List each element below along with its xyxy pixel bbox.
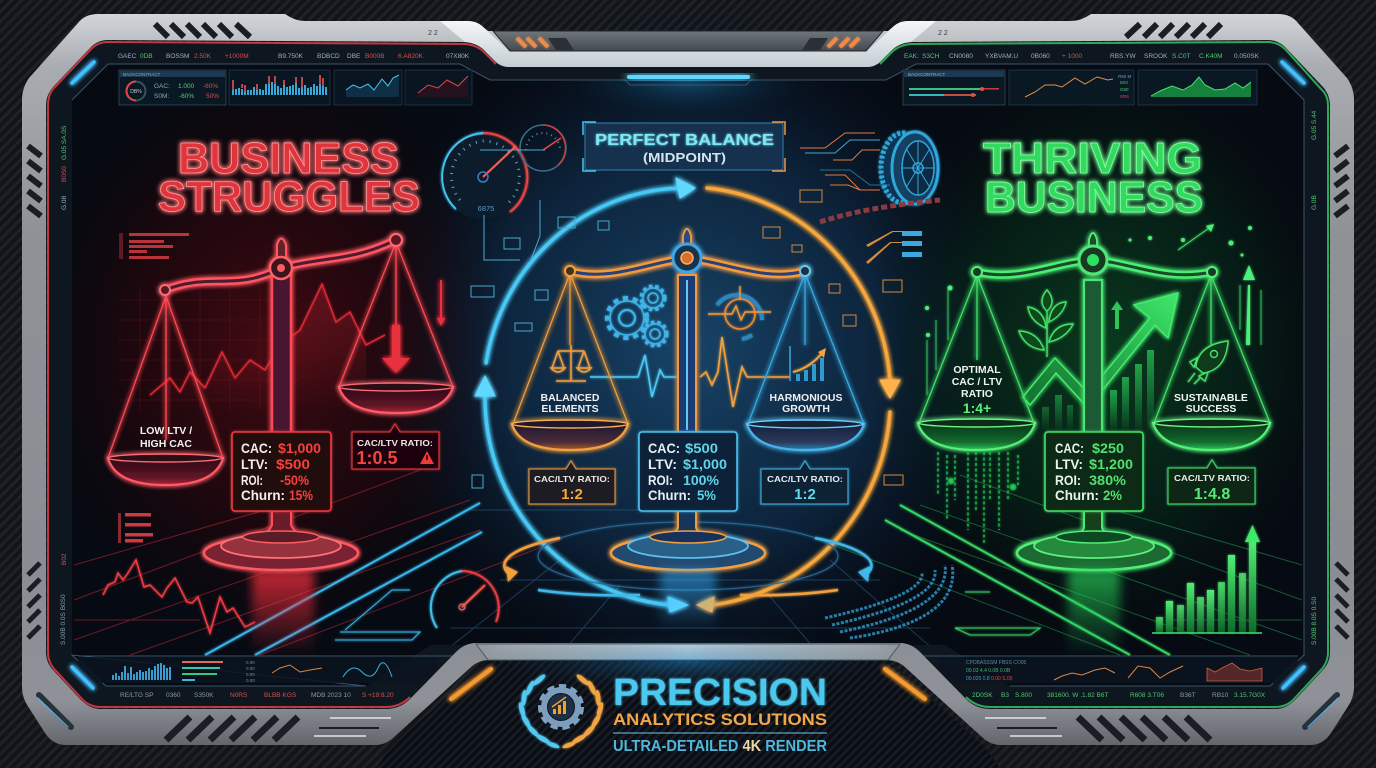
orange mini line bbox=[1054, 668, 1115, 680]
side rail text: right: G.05 S.44 bbox=[1311, 110, 1318, 140]
icon: growth mini chart bbox=[790, 346, 826, 381]
gauge: lower speedometer bbox=[431, 571, 499, 628]
top center white band bbox=[440, 21, 936, 67]
side rail text: left: G.05 SA.0S bbox=[61, 125, 68, 160]
metrics box: blue: 5% bbox=[697, 487, 717, 503]
side rail text: left: S.00B 0.0S B0S0 bbox=[60, 594, 67, 645]
label: optimal ratio: CAC / LTV bbox=[952, 376, 1002, 388]
tire tracks bbox=[825, 565, 953, 638]
metrics box: blue: ROI: bbox=[648, 472, 673, 488]
metrics box: red: CAC: bbox=[241, 440, 272, 456]
red chart behind left scale bbox=[118, 284, 385, 410]
ticker: bottom left: MDB 2023 10 bbox=[311, 692, 351, 699]
label: optimal ratio bbox=[952, 364, 1002, 416]
icon: laurel left bbox=[518, 673, 560, 749]
ticker: bottom right bbox=[972, 692, 1266, 699]
side rail text: right: G.0B bbox=[1311, 195, 1318, 210]
label: balanced elements bbox=[541, 392, 600, 415]
progress mini list: 0.00 bbox=[246, 660, 255, 665]
orange line mini panel: B50 bbox=[1120, 80, 1129, 85]
ticker: top left: BOSSM bbox=[166, 53, 189, 60]
blue slot on metal bbox=[38, 695, 1338, 727]
metrics mini panel bbox=[119, 70, 226, 105]
metrics box: red: LTV: bbox=[241, 456, 268, 472]
icon: gears bbox=[607, 286, 667, 346]
ticker: bottom left: RE/LTG SP bbox=[120, 692, 153, 699]
metrics box: blue: $1,000 bbox=[683, 456, 727, 472]
scale: green elevated bbox=[918, 233, 1270, 570]
icon: mini scale bbox=[551, 345, 591, 381]
scale: balanced center bbox=[512, 229, 864, 570]
dashboard strip: top right bbox=[903, 70, 1257, 105]
label: low ltv high cac: LOW LTV / bbox=[140, 425, 192, 437]
right green side light bbox=[1323, 115, 1325, 660]
metrics box: green bbox=[1045, 432, 1143, 511]
reflection under center scale bbox=[660, 570, 716, 630]
title: business struggles bbox=[158, 134, 420, 221]
metrics box: blue: Churn: bbox=[648, 487, 691, 503]
metrics mini panel: -60% bbox=[179, 93, 194, 100]
heading: perfect balance bbox=[583, 122, 785, 171]
green area mini panel bbox=[1138, 70, 1257, 105]
gauge: large speedometer: 6875 bbox=[478, 204, 494, 213]
bar chart background bbox=[1042, 350, 1154, 430]
curved striped track near tire bbox=[820, 200, 940, 222]
ticker: top right: RBS.YW bbox=[1110, 53, 1137, 60]
table mini block bbox=[966, 660, 1027, 682]
dashboard strip: bottom left bbox=[78, 657, 438, 683]
label: low ltv high cac: HIGH CAC bbox=[140, 438, 192, 450]
side rail text: left: B0S0 bbox=[61, 166, 68, 182]
metrics mini panel: GAC: bbox=[154, 83, 170, 90]
metrics box: green: $250 bbox=[1092, 440, 1124, 456]
heartbeat line bbox=[590, 337, 790, 407]
orange line mini panel: R60 M bbox=[1118, 74, 1132, 79]
progress mini list: 0.00 bbox=[246, 678, 255, 683]
ticker: top left: GAEC bbox=[118, 53, 137, 60]
dashboard strip: top left bbox=[119, 70, 472, 105]
ratio box: red: 1:0.5 bbox=[356, 448, 398, 468]
red line mini panel bbox=[405, 70, 472, 105]
title: thriving business: BUSINESS bbox=[985, 173, 1203, 222]
text: 2 2 bbox=[938, 30, 948, 37]
metrics mini panel: 50% bbox=[206, 93, 219, 100]
title: thriving business: THRIVING bbox=[983, 134, 1202, 183]
side rail text: left: B02 bbox=[61, 553, 68, 565]
table mini block: CPDBASSSM FBSS CO05 bbox=[966, 660, 1027, 666]
scale: red tilted bbox=[108, 234, 453, 570]
metrics mini panel: DB% bbox=[130, 89, 142, 95]
brand divider bbox=[613, 732, 827, 734]
ticker: bottom left: BLBB KGS bbox=[264, 692, 297, 699]
metrics box: red: $500 bbox=[276, 456, 310, 472]
ticker: top left: BDBCD bbox=[317, 53, 340, 60]
icon: rocket bbox=[1188, 341, 1228, 384]
ticker: top right bbox=[904, 53, 1260, 60]
gauge: small speedometer bbox=[520, 125, 566, 171]
brand name: PRECISION bbox=[613, 672, 827, 714]
top center inset bar bbox=[493, 31, 883, 51]
ratio box: orange: CAC/LTV RATIO: bbox=[534, 474, 610, 484]
ticker: bottom right: B36T bbox=[1180, 692, 1196, 699]
title: business struggles: BUSINESS bbox=[178, 134, 399, 183]
ticker: top left: 07X80K bbox=[446, 53, 470, 60]
blue road lines left bbox=[205, 503, 482, 655]
base rings with arrows bbox=[504, 522, 872, 595]
brand tagline: ULTRA-DETAILED 4K RENDER bbox=[613, 738, 827, 755]
panel: business struggles bbox=[108, 134, 453, 655]
metal groove lines bbox=[314, 718, 1062, 736]
ticker: top right: SROOK bbox=[1144, 53, 1168, 60]
blue bars mini chart bbox=[113, 663, 170, 680]
bottom center metal strip bbox=[476, 644, 900, 660]
label: optimal ratio: RATIO bbox=[961, 388, 993, 400]
ratio box: blue bbox=[761, 461, 848, 504]
logo panel carbon bbox=[376, 661, 1000, 768]
icon: laurel right bbox=[562, 673, 604, 749]
reflection under red scale bbox=[252, 570, 314, 655]
bottom red glow strip bbox=[120, 703, 385, 705]
ratio box: orange bbox=[529, 461, 615, 504]
ticker: top right: S.C0T bbox=[1172, 53, 1190, 60]
down arrows bbox=[382, 280, 445, 373]
progress mini panel bbox=[903, 70, 1005, 105]
ticker: top right: S3CH bbox=[922, 53, 940, 60]
ratio box: green: 1:4.8 bbox=[1194, 486, 1230, 503]
ticker: top right: YXBVAM.U bbox=[985, 53, 1018, 60]
small up arrow bbox=[1111, 301, 1123, 329]
title: thriving business bbox=[983, 134, 1203, 222]
label: balanced elements: BALANCED bbox=[541, 392, 600, 404]
metrics box: red: ROI: bbox=[241, 472, 263, 488]
label: balanced elements: ELEMENTS bbox=[541, 403, 599, 415]
green growth bar chart bbox=[1152, 525, 1262, 633]
progress mini list: 0.00 bbox=[246, 672, 255, 677]
metrics box: red: 15% bbox=[289, 487, 313, 503]
ticker: bottom right: RB10 bbox=[1212, 692, 1229, 699]
metrics mini panel: S0M: bbox=[154, 93, 169, 100]
digital rain below left pan bbox=[938, 452, 1018, 545]
label: harmonious growth bbox=[770, 392, 842, 415]
cyan wave mini line bbox=[343, 663, 392, 677]
blue spec bars near right bbox=[866, 231, 922, 264]
orange led bars bbox=[451, 669, 925, 699]
dashboard strip: bottom right bbox=[938, 657, 1298, 683]
title: business struggles: STRUGGLES bbox=[158, 173, 420, 221]
side rail text: right bbox=[1311, 110, 1318, 645]
icon: plant bbox=[1019, 290, 1073, 357]
circuit lines to tire bbox=[800, 133, 890, 190]
orange line mini panel bbox=[1009, 70, 1134, 105]
metrics box: blue: 100% bbox=[683, 472, 720, 488]
inner neon border: green bbox=[880, 42, 1328, 707]
ratio box: green bbox=[1168, 460, 1255, 504]
bottom green glow strip bbox=[990, 703, 1270, 705]
ticker: bottom right: R608 3.T06 bbox=[1130, 692, 1164, 699]
label: harmonious growth: GROWTH bbox=[782, 403, 830, 415]
metrics box: green: Churn: bbox=[1055, 487, 1099, 503]
ticker: top right: EAK: bbox=[904, 53, 919, 60]
ratio box: red bbox=[352, 424, 439, 469]
progress mini list bbox=[182, 660, 255, 683]
bar mini panel bbox=[229, 70, 330, 105]
label: sustainable success bbox=[1174, 392, 1248, 415]
metrics mini panel: BACKCONTRACT bbox=[123, 72, 161, 77]
ticker: top left: B000B bbox=[365, 53, 385, 60]
orange line mini panel: SR6 bbox=[1120, 94, 1129, 99]
metrics mini panel: -60% bbox=[203, 83, 218, 90]
metrics box: green: 2% bbox=[1103, 487, 1123, 503]
ratio box: blue: 1:2 bbox=[794, 486, 816, 503]
metrics box: blue: $500 bbox=[685, 440, 718, 456]
ticker: top left: 6.A820K bbox=[398, 53, 424, 60]
table mini block: 00.03 4.4 0.0B 0.0B bbox=[966, 668, 1011, 674]
ticker: top left: 2.50K bbox=[194, 53, 212, 60]
ticker: top right: C.K40M bbox=[1199, 53, 1222, 60]
icon: gear with chart bbox=[541, 687, 581, 727]
ticker: bottom left: S +19:8.20 bbox=[362, 692, 394, 699]
histogram bbox=[1207, 663, 1262, 681]
heading: perfect balance: PERFECT BALANCE bbox=[595, 132, 774, 149]
blue corner LEDs bbox=[72, 62, 1304, 688]
side rail text: right: S.00B 8.0S 0.S0 bbox=[1311, 597, 1318, 645]
data icons scattered around center bbox=[471, 150, 903, 488]
label: harmonious growth: HARMONIOUS bbox=[770, 392, 842, 404]
orange hatch lights bbox=[517, 38, 859, 47]
bright green top strip bbox=[958, 45, 1230, 47]
metrics box: blue: LTV: bbox=[648, 456, 677, 472]
ticker: bottom left: N0RS bbox=[230, 692, 248, 699]
inner neon border: red bbox=[48, 42, 496, 707]
label: optimal ratio: 1:4+ bbox=[963, 400, 991, 416]
heading: perfect balance: (MIDPOINT) bbox=[643, 150, 726, 165]
ticker: top left: +1000M bbox=[225, 53, 249, 60]
bright red top strip bbox=[146, 45, 417, 47]
ratio box: orange: 1:2 bbox=[561, 486, 583, 503]
ticker: top left: B9.750K bbox=[278, 53, 304, 60]
ticker: top right: 0B060 bbox=[1031, 53, 1050, 60]
ticker: top left: DBE bbox=[347, 53, 361, 60]
gauge: large speedometer bbox=[441, 133, 527, 219]
particles rising bbox=[925, 224, 1261, 395]
metrics mini panel: 1.000 bbox=[178, 83, 195, 90]
icon: target with pulse bbox=[708, 286, 771, 339]
ticker: bottom right: S.800 bbox=[1015, 692, 1032, 699]
metrics box: red: -50% bbox=[280, 472, 309, 488]
ticker: bottom left: 0360 bbox=[166, 692, 181, 699]
ticker: top right: + 1000 bbox=[1062, 53, 1082, 60]
icon: tire bbox=[881, 132, 938, 204]
reflection under green scale bbox=[1068, 570, 1120, 655]
ratio box: blue: CAC/LTV RATIO: bbox=[767, 474, 843, 484]
ticker: bottom right: B3 bbox=[1001, 692, 1009, 699]
metrics box: green: LTV: bbox=[1055, 456, 1083, 472]
ticker: bottom right: 381600. W .1.82 B6T bbox=[1047, 692, 1108, 699]
ratio box: green: CAC/LTV RATIO: bbox=[1174, 473, 1250, 483]
logo panel glow bbox=[478, 632, 898, 692]
ticker: bottom right: 3.15.7G0X bbox=[1234, 692, 1266, 699]
perspective floor grid bbox=[74, 470, 1302, 655]
top center light bar bbox=[627, 75, 750, 79]
green road lines right bbox=[885, 505, 1170, 655]
icon: rising zigzag arrow bbox=[1023, 293, 1178, 408]
ticker: bottom left bbox=[120, 692, 394, 699]
progress mini list: 0.00 bbox=[246, 666, 255, 671]
orange line mini panel: G50 bbox=[1120, 87, 1129, 92]
ticker: top left bbox=[118, 53, 470, 60]
ticker: top right: CN0080 bbox=[949, 53, 973, 60]
logo: precision analytics solutions bbox=[518, 672, 827, 755]
circle: blue and orange balance arrows bbox=[475, 178, 900, 612]
label: sustainable success: SUSTAINABLE bbox=[1174, 392, 1248, 404]
left orange side light bbox=[51, 115, 53, 190]
metrics box: blue bbox=[639, 432, 737, 511]
ticker: bottom right: 2D0SK bbox=[972, 692, 993, 699]
thin screen outline bbox=[72, 64, 1304, 686]
dark slots beside hatches bbox=[548, 38, 828, 50]
side rail text: left: G.08 bbox=[61, 196, 68, 210]
brand sub name: ANALYTICS SOLUTIONS bbox=[613, 711, 827, 729]
blue line mini panel bbox=[334, 70, 402, 105]
ticker: top right: 0.050SK bbox=[1234, 53, 1260, 60]
label: low ltv high cac bbox=[140, 425, 192, 450]
ticker: bottom left: S350K bbox=[194, 692, 214, 699]
panel: perfect balance bbox=[512, 122, 864, 630]
red bar list upper bbox=[119, 233, 189, 259]
table mini block: 00.025 0.8 0.00 S.00 bbox=[966, 676, 1013, 682]
red bar list lower bbox=[118, 513, 153, 543]
side tabs behind frame bbox=[40, 28, 1336, 95]
mixed mini line bbox=[1128, 666, 1183, 678]
panel: thriving business bbox=[918, 134, 1270, 655]
progress mini panel: BACKCONTRACT bbox=[908, 72, 946, 77]
ratio box: red: CAC/LTV RATIO: bbox=[357, 438, 433, 448]
metrics box: green: ROI: bbox=[1055, 472, 1081, 488]
label: optimal ratio: OPTIMAL bbox=[953, 364, 1001, 376]
bolts: 2 2 bbox=[428, 30, 438, 37]
metrics box: red bbox=[232, 432, 331, 511]
metrics box: green: 380% bbox=[1089, 472, 1127, 488]
metrics box: red: Churn: bbox=[241, 487, 285, 503]
orange mini line bbox=[272, 665, 322, 673]
side rail text: left bbox=[60, 125, 68, 645]
metrics box: green: $1,200 bbox=[1089, 456, 1133, 472]
label: sustainable success: SUCCESS bbox=[1186, 403, 1236, 415]
metrics box: red: $1,000 bbox=[278, 440, 321, 456]
red falling line chart bbox=[103, 560, 255, 633]
metrics box: green: CAC: bbox=[1055, 440, 1084, 456]
ticker: top left: 0DB bbox=[140, 53, 153, 60]
metrics box: blue: CAC: bbox=[648, 440, 680, 456]
